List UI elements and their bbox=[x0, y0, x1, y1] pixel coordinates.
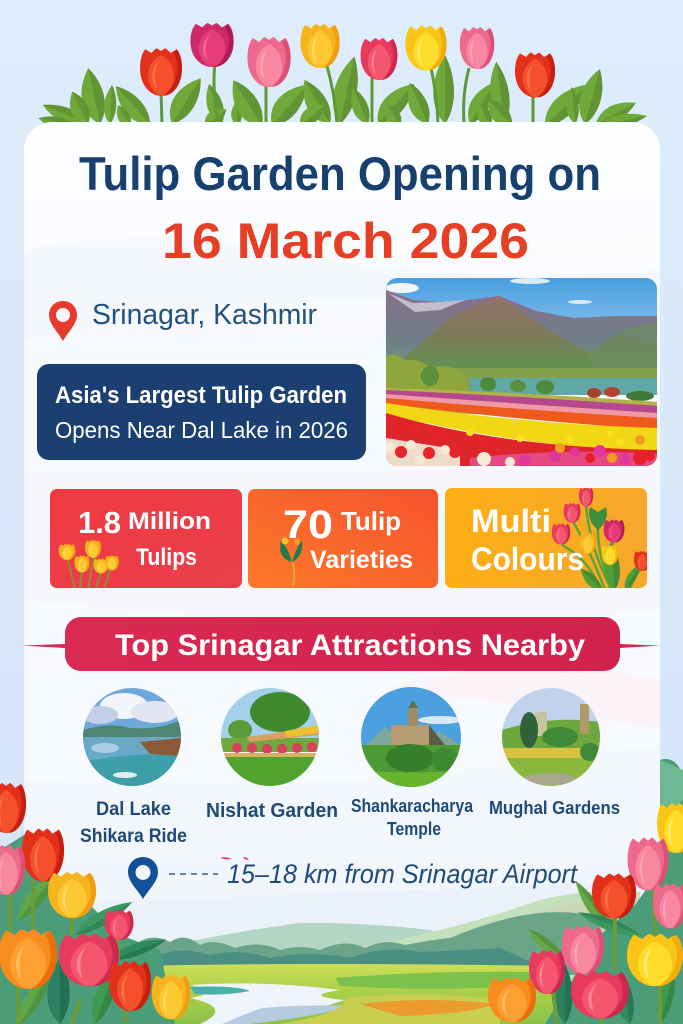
label bbox=[80, 799, 187, 847]
attraction: Nishat Garden bbox=[206, 688, 338, 822]
location text: Srinagar, Kashmir bbox=[92, 299, 317, 331]
icon: small tulip bbox=[280, 538, 302, 586]
stat card: 1.8 million tulips: Tulips bbox=[136, 544, 197, 571]
heading line 1: Tulip Garden Opening on bbox=[79, 147, 601, 200]
label: Nishat Garden bbox=[206, 800, 338, 822]
label bbox=[351, 796, 474, 839]
stat card: 70 tulip varieties: 70 bbox=[283, 503, 333, 547]
icon: blue map pin bbox=[128, 857, 158, 899]
callout: largest garden bbox=[37, 364, 366, 460]
tree line bbox=[135, 912, 620, 975]
stat card: 70 tulip varieties bbox=[248, 489, 438, 588]
callout: largest garden: Opens Near Dal Lake in 2026 bbox=[55, 417, 348, 443]
heading line 2: date: 16 March 2026 bbox=[162, 213, 529, 269]
river bbox=[190, 983, 345, 1024]
section banner bbox=[22, 617, 660, 671]
dashes bbox=[169, 873, 218, 875]
stat card: multi colours bbox=[445, 488, 650, 594]
photo: tulip fields with mountains bbox=[385, 278, 657, 467]
attraction: Shankaracharya Temple bbox=[351, 687, 474, 839]
stat card: 1.8 million tulips bbox=[50, 489, 242, 590]
label: Shikara Ride bbox=[80, 826, 187, 847]
meadow bbox=[130, 964, 600, 1024]
location row bbox=[49, 299, 317, 341]
bottom landscape bbox=[24, 880, 660, 1024]
label: Temple bbox=[387, 819, 441, 839]
flower stripes bbox=[386, 388, 657, 414]
label: Shankaracharya bbox=[351, 796, 474, 816]
label: Dal Lake bbox=[96, 799, 171, 820]
photo: temple bbox=[361, 687, 462, 790]
attraction: Mughal Gardens bbox=[489, 688, 620, 818]
stat card: multi colours: Multi bbox=[471, 503, 551, 539]
left tulip cluster bbox=[0, 783, 190, 1024]
distance from airport row bbox=[128, 857, 578, 899]
stat card: 70 tulip varieties: Varieties bbox=[310, 546, 413, 574]
photo: garden bbox=[221, 688, 319, 787]
icon: tulip bouquet bbox=[552, 488, 650, 594]
callout: largest garden: Asia's Largest Tulip Garden bbox=[55, 382, 347, 409]
distance text: 15–18 km from Srinagar Airport bbox=[227, 859, 578, 889]
stat card: multi colours: Colours bbox=[471, 541, 584, 577]
distant hills bbox=[150, 923, 500, 960]
icon: orange tulips bbox=[59, 540, 119, 590]
stat card: 1.8 million tulips: 1.8 bbox=[78, 505, 121, 540]
right tulip cluster bbox=[488, 759, 683, 1024]
stat card: 1.8 million tulips: Million bbox=[128, 508, 211, 535]
icon: red map pin bbox=[49, 301, 77, 341]
section banner: Top Srinagar Attractions Nearby bbox=[115, 629, 585, 662]
top tulip border bbox=[37, 23, 648, 133]
tree clumps bbox=[386, 355, 470, 392]
icon: tulip heads bbox=[140, 23, 555, 98]
attraction: Dal Lake bbox=[80, 688, 187, 847]
label: Mughal Gardens bbox=[489, 797, 620, 818]
stat card: 70 tulip varieties: Tulip bbox=[341, 506, 401, 536]
photo: gardens bbox=[502, 688, 600, 788]
title bbox=[79, 147, 601, 269]
photo: lake bbox=[82, 688, 181, 787]
